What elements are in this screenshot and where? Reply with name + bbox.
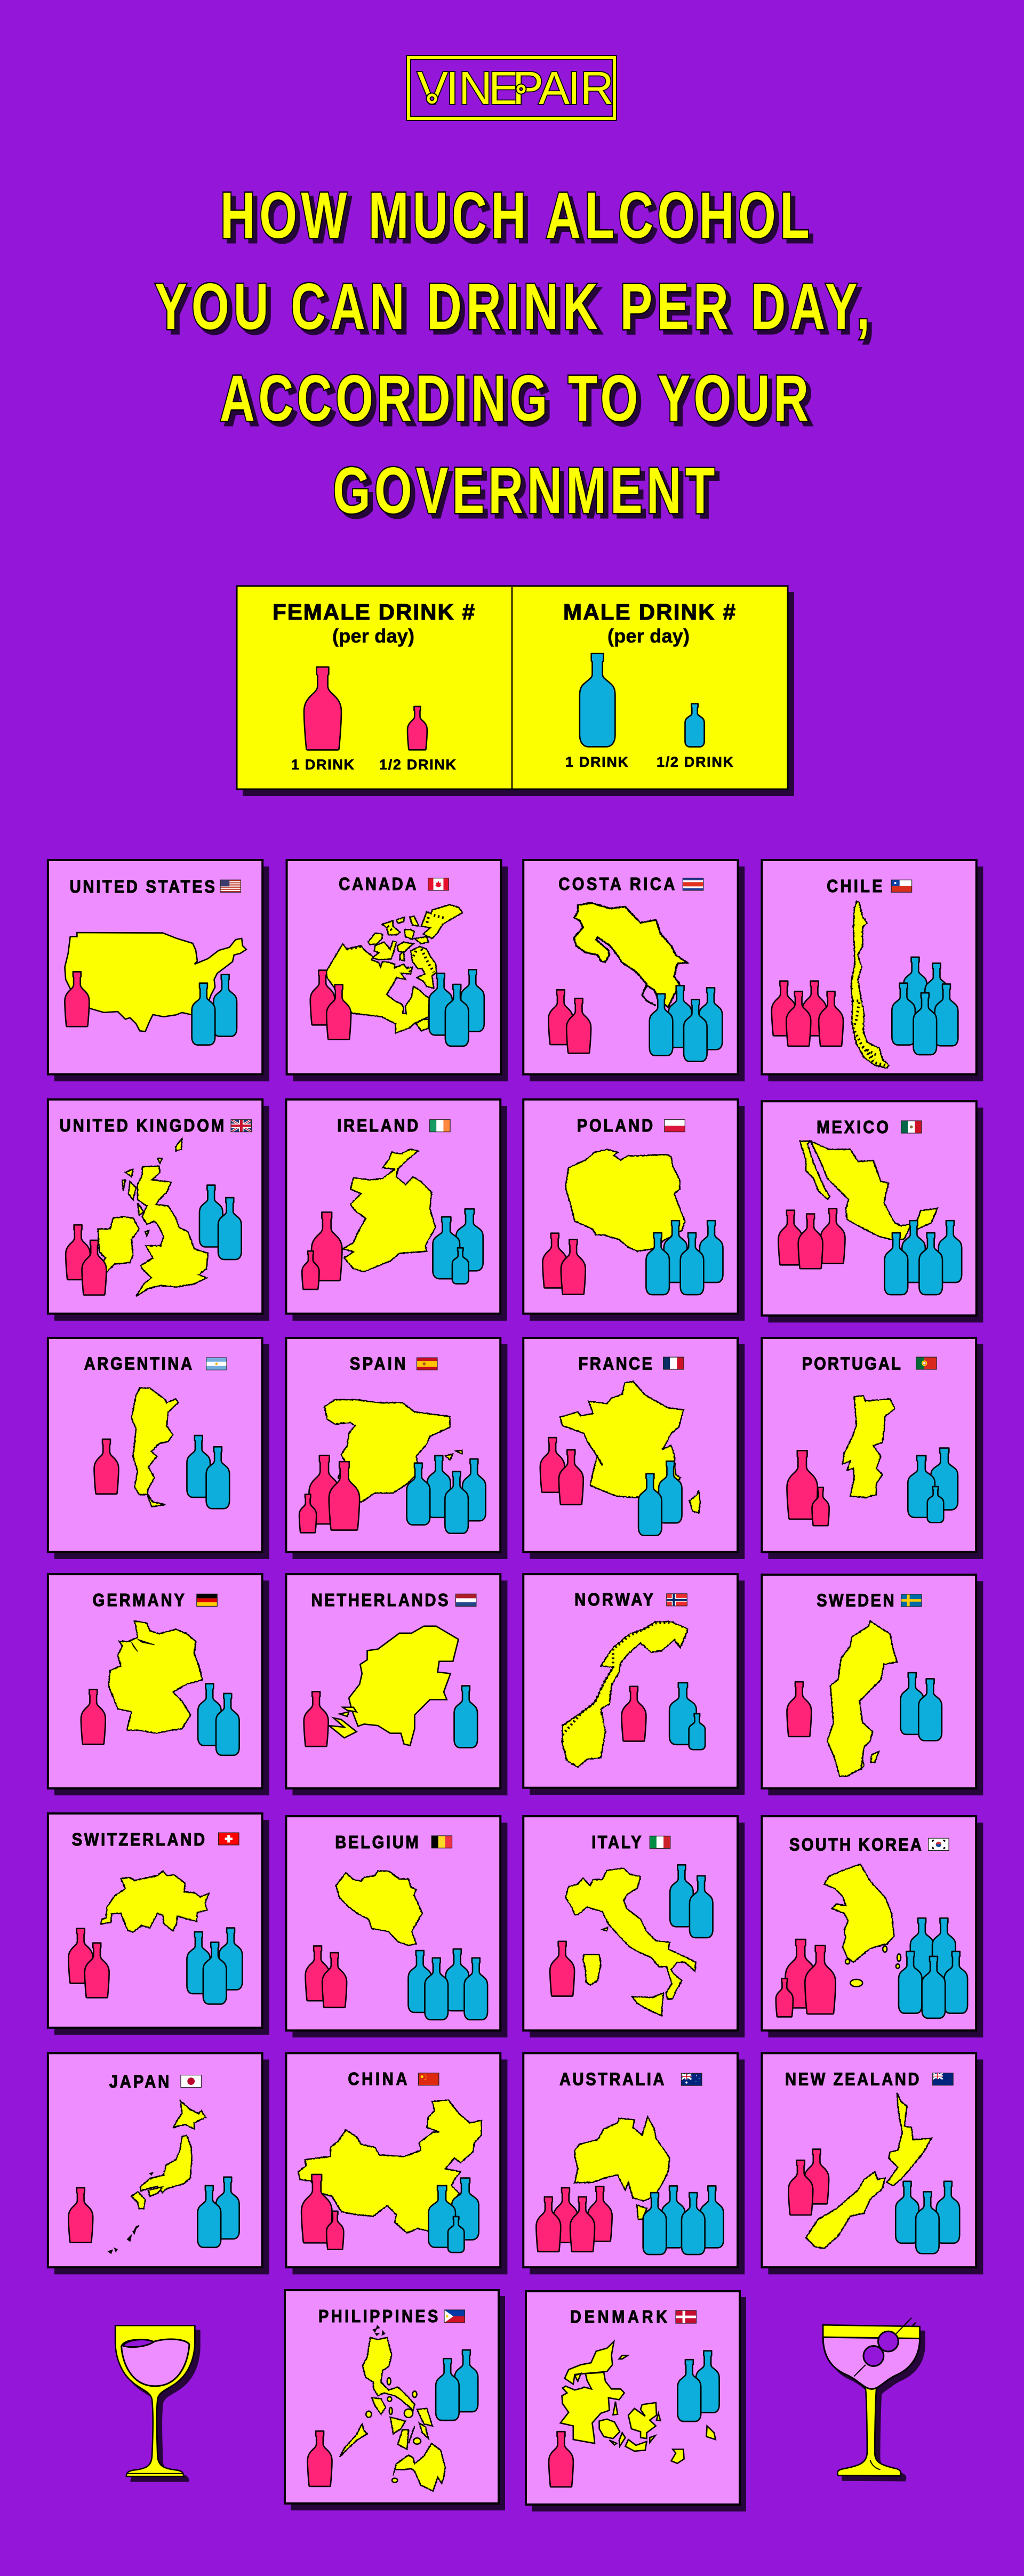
map: Argentina xyxy=(132,1388,178,1507)
panel: Switzerland xyxy=(48,1813,269,2035)
map: Philippines xyxy=(340,2326,445,2491)
legend heading: female: FEMALE DRINK # xyxy=(273,599,475,624)
map: China xyxy=(298,2100,482,2233)
map: Canada xyxy=(326,905,462,1033)
flag: Germany xyxy=(197,1594,217,1606)
flag: Portugal xyxy=(916,1357,937,1369)
bottles: female xyxy=(308,2431,332,2486)
heading: United Kingdom: UNITED KINGDOM xyxy=(60,1116,224,1136)
map: Portugal xyxy=(843,1395,895,1498)
panel: Germany xyxy=(48,1574,269,1795)
heading: Portugal: PORTUGAL xyxy=(802,1354,901,1374)
bottles: female xyxy=(540,1438,583,1505)
bottles: female xyxy=(788,2149,829,2215)
panel: South Korea xyxy=(762,1816,983,2037)
flag: Sweden xyxy=(901,1594,922,1607)
flag: France xyxy=(663,1357,684,1369)
title: ACCORDING TO YOUR xyxy=(220,362,809,435)
bottles: female xyxy=(68,1929,109,1997)
heading: Argentina: ARGENTINA xyxy=(84,1354,192,1374)
heading: Sweden: SWEDEN xyxy=(817,1591,894,1610)
map: United Kingdom xyxy=(98,1138,208,1296)
heading: Denmark: DENMARK xyxy=(570,2307,668,2326)
title xyxy=(155,179,870,527)
title: HOW MUCH ALCOHOL xyxy=(220,179,810,252)
flag: Chile xyxy=(891,880,912,892)
flag: Japan xyxy=(181,2075,201,2088)
panel: Sweden xyxy=(762,1575,983,1795)
panel: Denmark xyxy=(526,2291,746,2511)
bottles: female xyxy=(549,2431,573,2487)
heading: Mexico: MEXICO xyxy=(817,1117,889,1137)
heading: Poland: POLAND xyxy=(577,1116,653,1136)
female bottle: half drink xyxy=(407,707,427,750)
bottles: male xyxy=(187,1928,242,2004)
bottles: female xyxy=(94,1439,118,1494)
heading: United States: UNITED STATES xyxy=(70,877,215,896)
map: Norway xyxy=(563,1622,688,1767)
panel: Italy xyxy=(523,1816,745,2037)
flag: South Korea xyxy=(929,1838,949,1850)
heading: Belgium: BELGIUM xyxy=(335,1832,419,1852)
label: male half drink: 1/2 DRINK xyxy=(657,754,734,770)
heading: Spain: SPAIN xyxy=(350,1354,405,1374)
map: Chile xyxy=(851,901,889,1068)
bottles: female xyxy=(310,970,351,1039)
panel: Netherlands xyxy=(286,1574,507,1795)
bottles: male xyxy=(678,2351,719,2421)
flag: Belgium xyxy=(431,1836,452,1848)
heading: Philippines: PHILIPPINES xyxy=(318,2306,438,2326)
bottles: male xyxy=(198,2177,239,2248)
bottles: male xyxy=(436,2350,478,2420)
label: female 1 drink: 1 DRINK xyxy=(291,757,354,773)
bottles: male xyxy=(643,2186,724,2254)
panel: Australia xyxy=(523,2053,745,2274)
bottles: male xyxy=(899,1918,967,2018)
map: Australia xyxy=(575,2117,670,2219)
flag: Costa Rica xyxy=(683,878,703,890)
map: Italy xyxy=(565,1868,695,2016)
heading: Japan: JAPAN xyxy=(109,2072,169,2092)
bottles: female xyxy=(787,1682,811,1737)
flag: New Zealand xyxy=(933,2073,953,2085)
bottles: female xyxy=(778,1209,845,1269)
bottles: female xyxy=(536,2187,612,2252)
panel: Norway xyxy=(523,1574,745,1795)
map: France xyxy=(560,1381,700,1513)
flag: Poland xyxy=(665,1120,685,1132)
flag: United Kingdom xyxy=(231,1120,252,1132)
map: Costa Rica xyxy=(574,903,687,1007)
heading: New Zealand: NEW ZEALAND xyxy=(785,2069,919,2089)
bottles: male xyxy=(670,1865,713,1938)
map: Ireland xyxy=(343,1149,436,1272)
map: Belgium xyxy=(336,1871,422,1945)
panel: New Zealand xyxy=(762,2053,983,2274)
flag: Norway xyxy=(667,1594,687,1606)
panel: United Kingdom xyxy=(48,1100,269,1321)
legend subheading: male per day: (per day) xyxy=(607,625,690,647)
bottles: male xyxy=(646,1221,723,1295)
bottles: female xyxy=(302,1212,342,1289)
bottles: male xyxy=(885,1221,962,1295)
heading: Netherlands: NETHERLANDS xyxy=(311,1590,449,1610)
male bottle: 1 drink xyxy=(580,654,615,747)
panel: Philippines xyxy=(285,2290,505,2510)
bottles: male xyxy=(900,1673,942,1740)
panel: Poland xyxy=(523,1100,745,1321)
female bottle: 1 drink xyxy=(304,667,341,750)
bottles: male xyxy=(428,2178,479,2252)
bottles: female xyxy=(66,1225,106,1295)
panel: Belgium xyxy=(286,1816,507,2037)
bottles: female xyxy=(68,2188,93,2243)
label: male 1 drink: 1 DRINK xyxy=(565,754,628,770)
bottles: female xyxy=(81,1689,106,1744)
flag: Argentina xyxy=(206,1358,227,1370)
bottles: male xyxy=(669,1683,705,1750)
icon: martini glass xyxy=(823,2318,920,2476)
heading: Australia: AUSTRALIA xyxy=(559,2069,664,2089)
bottles: female xyxy=(787,1450,829,1526)
bottles: male xyxy=(429,969,484,1046)
bottles: male xyxy=(895,2181,959,2253)
heading: Ireland: IRELAND xyxy=(337,1116,418,1136)
panel: Portugal xyxy=(762,1338,983,1559)
heading: China: CHINA xyxy=(348,2069,407,2089)
heading: Canada: CANADA xyxy=(339,874,417,894)
title: GOVERNMENT xyxy=(333,454,715,527)
flag: United States xyxy=(220,880,241,892)
bottles: male xyxy=(192,975,237,1045)
bottles: male xyxy=(199,1185,242,1259)
map: Mexico xyxy=(800,1141,938,1240)
bottles: female xyxy=(548,990,591,1053)
heading: France: FRANCE xyxy=(579,1354,652,1374)
heading: Germany: GERMANY xyxy=(93,1590,185,1610)
panel: Spain xyxy=(286,1338,507,1559)
bottles: female xyxy=(304,1691,329,1746)
bottles: female xyxy=(542,1233,586,1294)
panel: Japan xyxy=(48,2053,269,2274)
flag: Ireland xyxy=(430,1120,450,1132)
flag: Italy xyxy=(650,1836,670,1848)
bottles: male xyxy=(454,1686,477,1748)
icon: wine glass xyxy=(115,2325,195,2476)
bottles: female xyxy=(306,1946,347,2008)
bottles: female xyxy=(550,1941,574,1996)
heading: Chile: CHILE xyxy=(827,877,883,896)
map: Netherlands xyxy=(329,1626,459,1746)
flag: Mexico xyxy=(901,1121,922,1133)
flag: Canada xyxy=(428,878,449,890)
map: New Zealand xyxy=(806,2093,931,2249)
flag: Denmark xyxy=(676,2310,696,2323)
panel: legend xyxy=(237,586,794,796)
bottles: male xyxy=(407,1456,486,1534)
panel: United States xyxy=(48,860,269,1081)
flag: Philippines xyxy=(444,2310,465,2323)
panel: France xyxy=(523,1338,745,1559)
bottles: female xyxy=(776,1939,836,2017)
flag: Spain xyxy=(417,1358,437,1370)
legend subheading: female per day: (per day) xyxy=(332,625,414,647)
panel: Chile xyxy=(762,860,983,1081)
heading: Switzerland: SWITZERLAND xyxy=(72,1829,205,1850)
heading: South Korea: SOUTH KOREA xyxy=(789,1835,922,1855)
bottles: female xyxy=(621,1687,646,1741)
map: Sweden xyxy=(827,1621,897,1776)
map: Spain xyxy=(324,1400,462,1502)
logo: VinePair: VINEPAIR xyxy=(417,62,614,114)
map: Germany xyxy=(109,1621,203,1734)
panel: Ireland xyxy=(286,1100,507,1321)
map: Denmark xyxy=(561,2341,716,2463)
map: Japan xyxy=(109,2101,205,2253)
bottles: male xyxy=(892,957,958,1055)
bottles: male xyxy=(187,1435,229,1508)
flag: Australia xyxy=(681,2073,702,2085)
male bottle: half drink xyxy=(685,704,705,747)
map: Switzerland xyxy=(101,1871,209,1932)
flag: Switzerland xyxy=(219,1833,239,1845)
bottles: female xyxy=(65,972,89,1026)
panel: Costa Rica xyxy=(523,860,745,1081)
bottles: male xyxy=(638,1461,682,1536)
title: YOU CAN DRINK PER DAY, xyxy=(155,270,870,343)
heading: Italy: ITALY xyxy=(591,1832,642,1852)
map: Poland xyxy=(565,1149,685,1251)
flag: Netherlands xyxy=(455,1594,476,1606)
bottles: male xyxy=(198,1684,239,1755)
map: United States xyxy=(65,933,246,1031)
bottles: male xyxy=(433,1209,483,1284)
legend heading: male: MALE DRINK # xyxy=(563,599,735,624)
panel: Canada xyxy=(287,860,508,1081)
bottles: female xyxy=(772,981,843,1046)
panel: Mexico xyxy=(762,1101,983,1322)
panel: Argentina xyxy=(48,1338,269,1559)
flag: China xyxy=(418,2073,439,2085)
bottles: female xyxy=(301,2174,343,2250)
bottles: male xyxy=(650,985,722,1062)
bottles: male xyxy=(908,1448,958,1522)
heading: Norway: NORWAY xyxy=(574,1590,653,1610)
bottles: female xyxy=(299,1456,359,1532)
bottles: male xyxy=(408,1949,487,2020)
map: South Korea xyxy=(824,1864,901,1987)
label: female half drink: 1/2 DRINK xyxy=(379,757,457,773)
panel: China xyxy=(286,2053,507,2274)
heading: Costa Rica: COSTA RICA xyxy=(558,874,675,894)
